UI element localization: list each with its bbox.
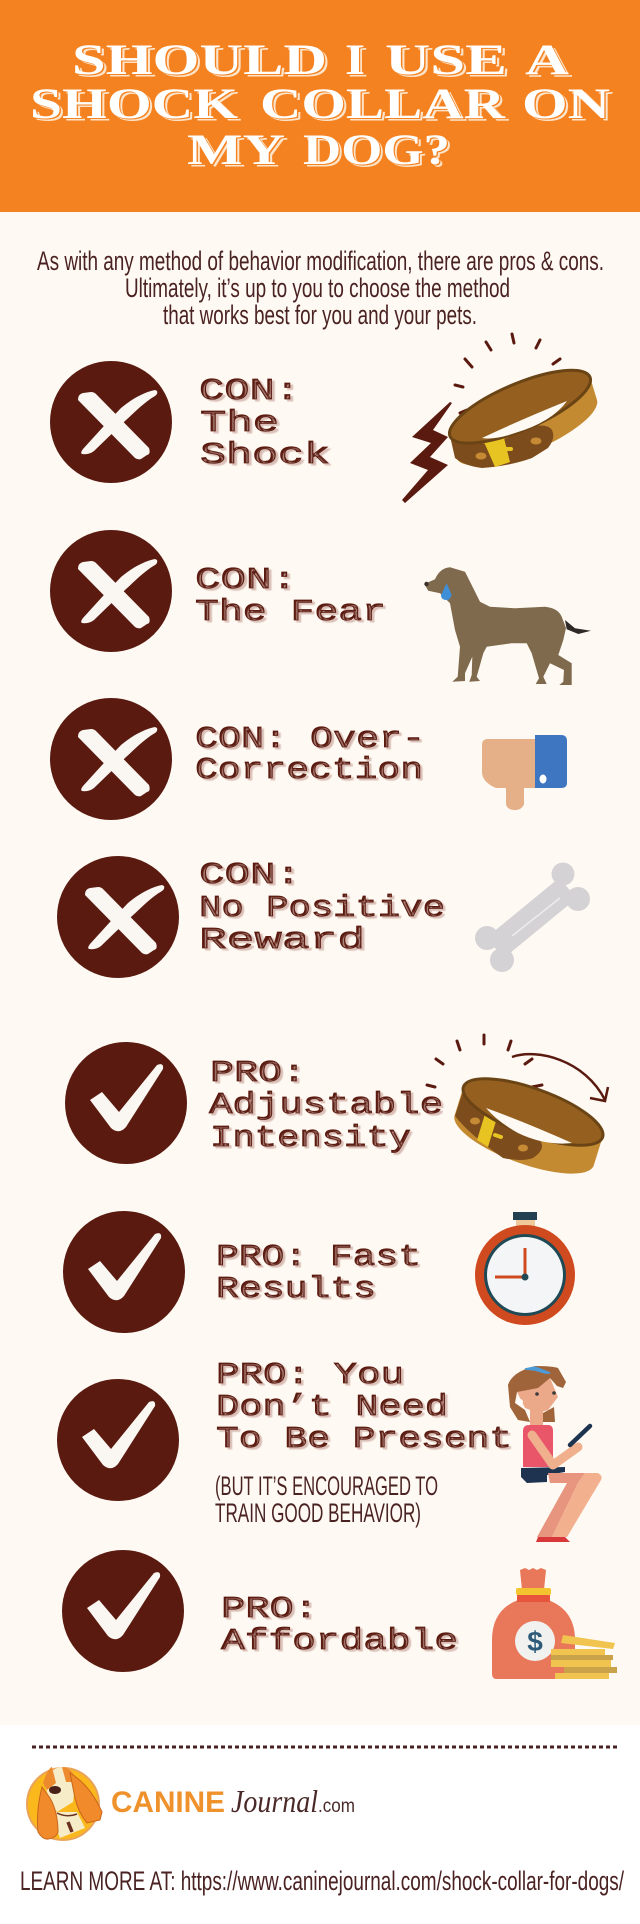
title banner: ON	[522, 81, 610, 128]
panel: con the shock	[50, 334, 599, 503]
text: pro fast results: Results	[216, 1272, 376, 1307]
title banner: DOG?	[303, 127, 450, 174]
text: con the fear	[195, 563, 386, 630]
icon: x mark	[57, 856, 179, 978]
title banner: SHOCK	[30, 81, 239, 128]
text: con the shock: CON:	[199, 374, 300, 409]
intro text: that works best for you and your pets.	[163, 300, 477, 330]
text: journal: Journal	[231, 1783, 318, 1819]
text: con over-correction	[195, 722, 425, 788]
text: pro adjustable intensity: Adjustable	[209, 1088, 443, 1123]
icon: x mark	[50, 530, 172, 652]
text: con over-correction: CON: Over-	[195, 722, 425, 757]
panel: pro you don't need to be present	[57, 1358, 602, 1542]
text: pro adjustable intensity: Intensity	[210, 1121, 411, 1156]
panel: pro fast results	[63, 1211, 575, 1333]
icon: check mark	[57, 1379, 179, 1501]
intro text	[37, 246, 604, 330]
icon: check mark	[65, 1042, 187, 1164]
text: dot com: .com	[318, 1796, 355, 1817]
icon: check mark	[62, 1550, 184, 1672]
text: pro you don't need to be present: To Be Present	[216, 1422, 512, 1457]
text: parenthetical note: (BUT IT’S ENCOURAGED TO	[215, 1471, 438, 1501]
logo: canine journal	[27, 1767, 355, 1840]
icon: stopwatch	[475, 1212, 575, 1325]
title banner: MY	[187, 127, 285, 174]
panel: pro affordable	[62, 1550, 617, 1679]
icon: x mark	[50, 698, 172, 820]
text: con the shock: The	[200, 406, 279, 441]
text: pro affordable: PRO:	[221, 1592, 318, 1627]
text: pro you don't need to be present: PRO: You	[216, 1358, 404, 1393]
title banner: A	[525, 37, 569, 84]
panel: pro adjustable intensity	[65, 1035, 610, 1174]
title banner	[0, 0, 640, 212]
text: con over-correction: Correction	[195, 753, 423, 788]
panel: con the fear	[50, 530, 591, 685]
title banner: SHOULD	[72, 37, 327, 84]
icon: collar with arrow	[427, 1035, 610, 1174]
title banner: COLLAR	[260, 81, 506, 128]
dotted divider	[32, 1746, 620, 1748]
icon: money bag and coins	[492, 1568, 617, 1679]
text: canine: CANINE	[111, 1786, 225, 1819]
text: con no positive reward	[199, 858, 445, 958]
icon: crying dog	[424, 567, 591, 685]
text: con the fear: CON:	[195, 563, 297, 598]
icon: check mark	[63, 1211, 185, 1333]
text: con no positive reward: Reward	[199, 923, 365, 958]
text: con the fear: The Fear	[195, 595, 386, 630]
text: parenthetical note: TRAIN GOOD BEHAVIOR)	[215, 1498, 421, 1528]
text: pro adjustable intensity	[209, 1056, 443, 1156]
icon: basset hound badge	[27, 1767, 102, 1840]
icon: collar with lightning bolt	[402, 334, 599, 503]
text: con no positive reward: CON:	[199, 858, 301, 893]
icon: thumbs down	[482, 735, 567, 810]
text: pro you don't need to be present: Don’t Need	[216, 1390, 448, 1425]
text: pro you don't need to be present	[216, 1358, 512, 1457]
icon: bone	[475, 862, 590, 972]
text: con the shock: Shock	[200, 438, 330, 473]
title banner: USE	[385, 37, 507, 84]
icon: x mark	[50, 361, 172, 483]
text: pro fast results	[216, 1240, 421, 1307]
text: con the shock	[199, 374, 330, 473]
text: con no positive reward: No Positive	[199, 891, 445, 926]
title banner: I	[345, 37, 365, 84]
icon: money bag and coins: $	[527, 1626, 543, 1657]
text: pro affordable	[221, 1592, 458, 1659]
text: pro fast results: PRO: Fast	[216, 1240, 421, 1275]
panel: con no positive reward	[57, 856, 590, 978]
text: parenthetical note	[215, 1471, 438, 1528]
text: pro adjustable intensity: PRO:	[210, 1056, 306, 1091]
panel: con over-correction	[50, 698, 567, 820]
icon: woman with phone	[508, 1366, 602, 1542]
text: pro affordable: Affordable	[221, 1624, 458, 1659]
